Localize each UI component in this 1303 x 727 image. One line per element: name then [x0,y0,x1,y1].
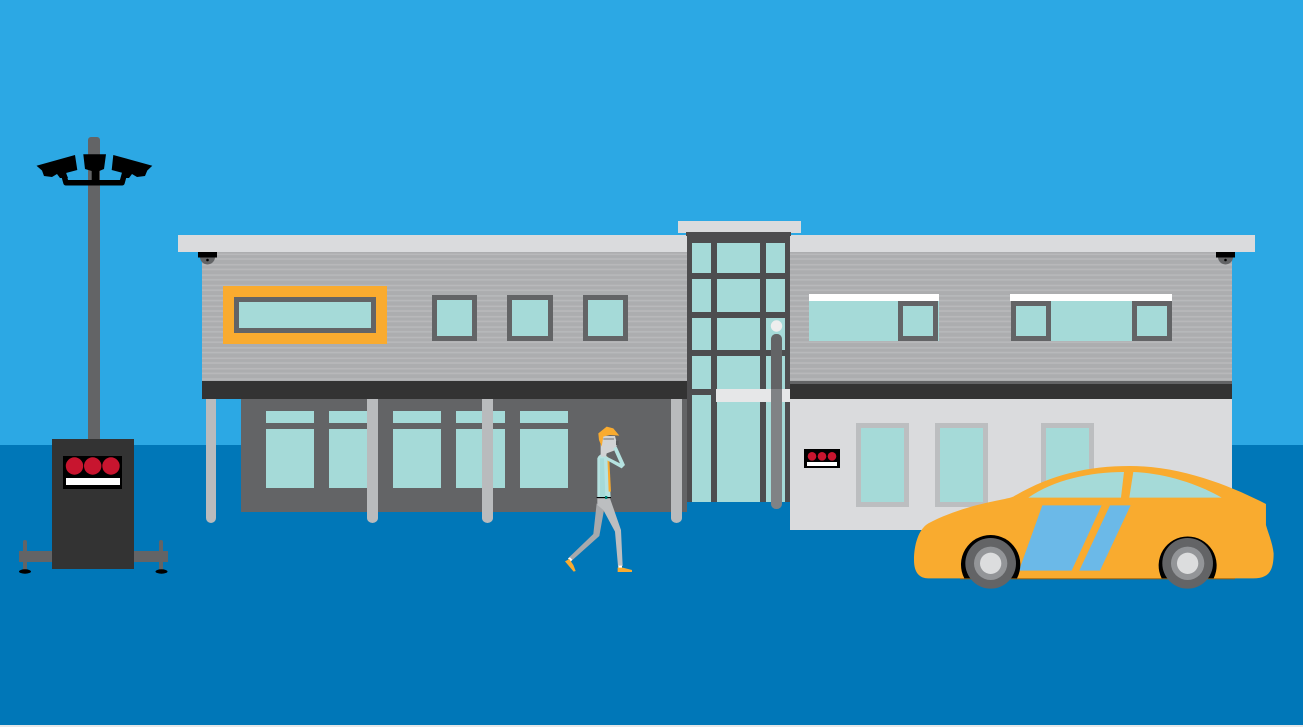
car underside line [960,578,1235,579]
phone [616,441,619,445]
front shoe [618,568,632,572]
sky background [0,0,1303,445]
door window large [1019,505,1102,571]
upper left windows [432,295,628,341]
building [178,221,1255,530]
front wheel [961,535,1020,589]
security tower [19,137,168,574]
arm shade [600,458,605,497]
left floor band [202,381,687,399]
right camera [112,155,152,178]
person walking on phone [565,427,632,572]
glasses [603,438,614,440]
lamp post [771,320,782,509]
right ground floor wall [790,399,1232,530]
pole [88,137,100,440]
base legs [19,540,168,571]
car [914,466,1274,589]
belt [597,496,611,499]
left ground floor wall [241,399,687,512]
camera bracket [63,172,125,183]
control box [52,439,134,569]
rear window [1129,472,1222,498]
support columns [206,399,682,523]
upper floor siding [202,252,1232,381]
ground [0,445,1303,725]
centre camera [83,154,106,181]
front window [1028,472,1124,498]
door window small [1079,505,1131,571]
rear wheel [1159,536,1217,589]
neck and face [601,436,617,457]
dome camera left [198,252,217,265]
upper right window two [1010,294,1172,341]
left camera [36,155,77,178]
dome camera right [1216,252,1235,265]
hair [598,427,619,447]
back shoe [565,559,576,572]
bottom strip [0,725,1303,727]
ground floor windows right [856,423,1094,507]
base feet [19,569,168,574]
roof [178,235,1255,252]
right floor band [790,384,1232,399]
ground floor windows left [266,411,568,488]
car body [914,466,1274,578]
back leg [568,503,604,562]
socks [568,557,622,568]
vest strip [607,456,611,492]
pole cameras [36,154,152,183]
upper right window one [809,294,939,341]
torso [597,454,611,497]
orange framed window [223,286,387,344]
front leg [597,498,623,566]
wall alarm sign [804,449,840,468]
right floor band highlight [790,381,1232,384]
raised arm [607,447,625,468]
alarm sign [63,456,122,489]
entrance canopy [716,389,790,402]
belt buckle [605,496,607,499]
central glass tower [678,221,801,502]
